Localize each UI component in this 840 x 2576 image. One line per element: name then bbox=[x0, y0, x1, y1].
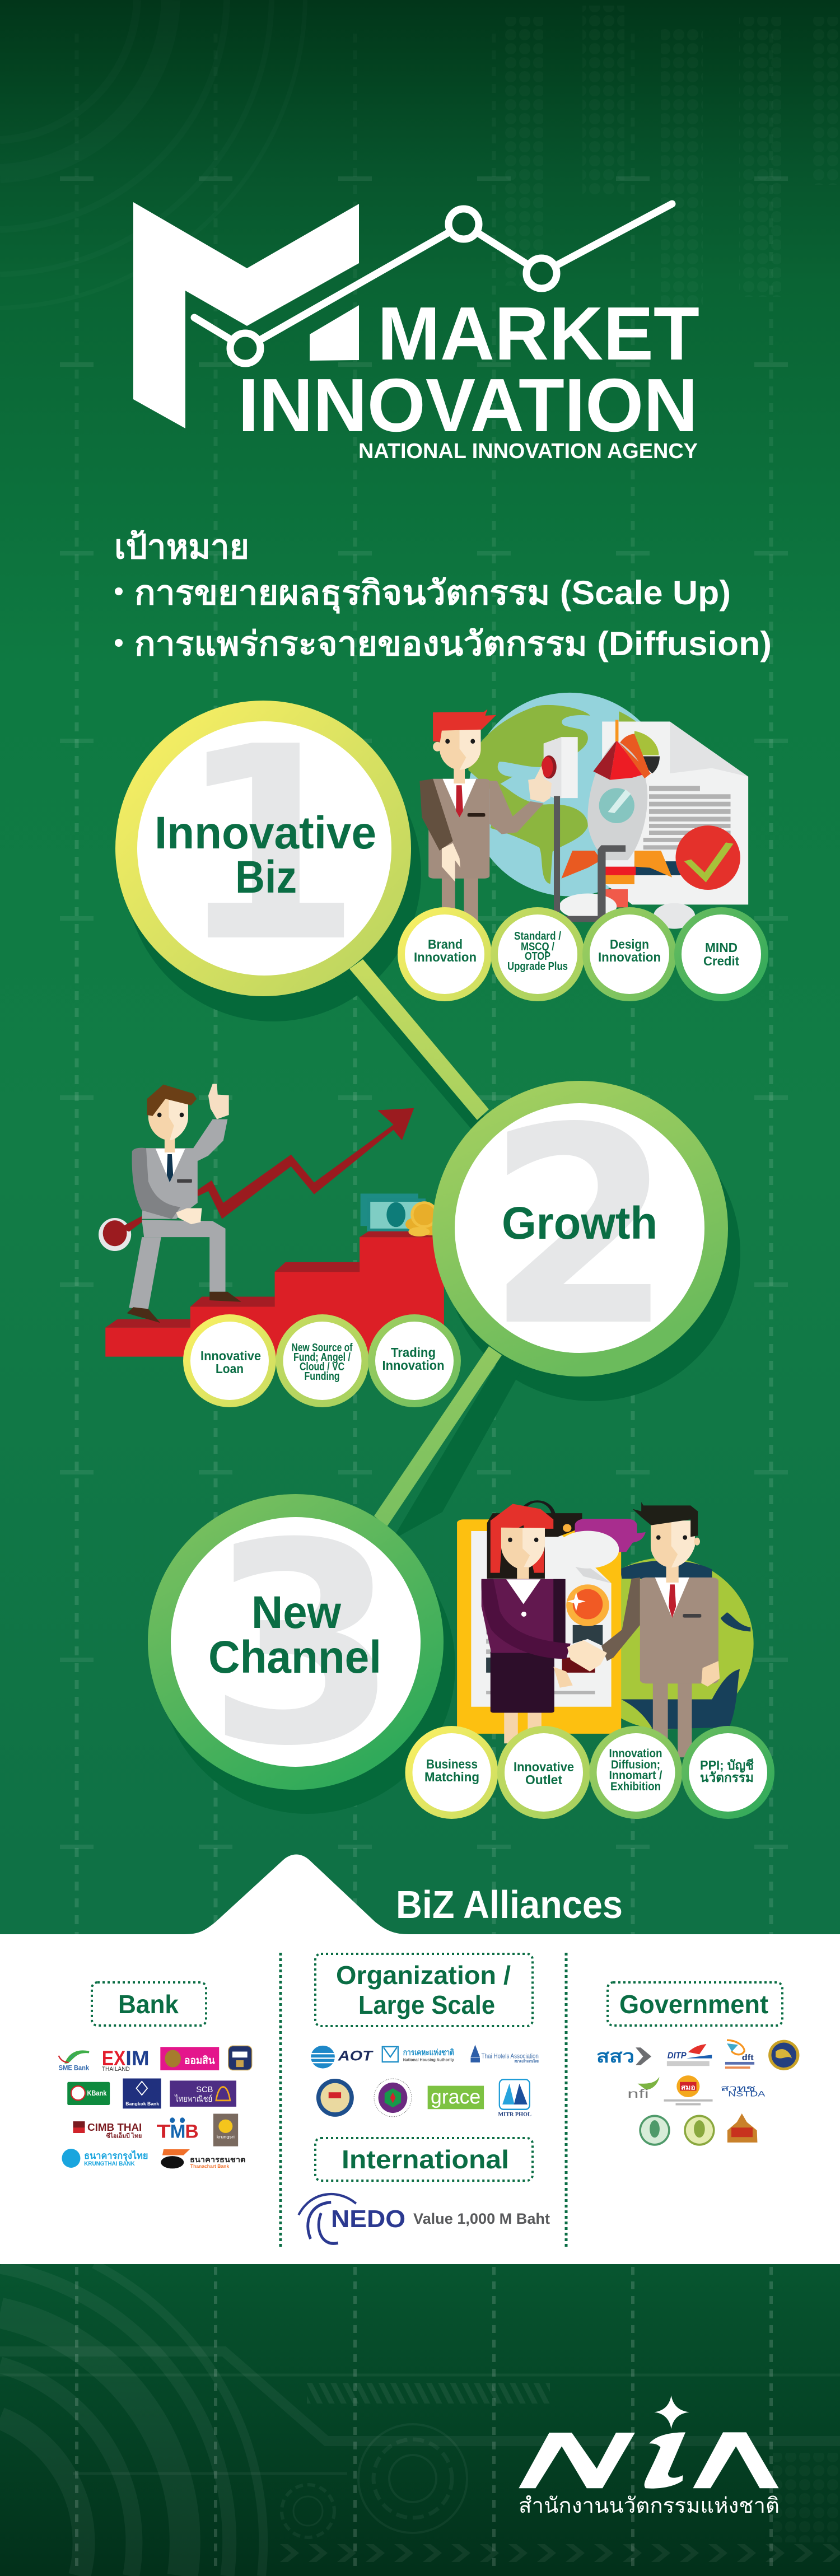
logo KBank bbox=[67, 2082, 110, 2105]
globe bbox=[576, 1558, 754, 1729]
logo EXIM Thailand: THAILAND bbox=[102, 2066, 130, 2073]
NIA Thai name: สำนักงานนวัตกรรมแห่งชาติ bbox=[519, 2494, 780, 2518]
big circle 3: New Channel bbox=[148, 1484, 444, 1807]
goal heading: เป้าหมาย bbox=[114, 528, 249, 566]
logo GSB: ออมสิน bbox=[184, 2055, 215, 2066]
logo TISI: สมอ bbox=[681, 2083, 696, 2092]
logo Bangkok Bank: Bangkok Bank bbox=[125, 2101, 160, 2107]
NEDO wordmark: NEDO bbox=[331, 2205, 405, 2233]
logo DFT: dft bbox=[742, 2053, 754, 2062]
logos: organizations and government bbox=[428, 2040, 799, 2146]
logo green seal one bbox=[639, 2115, 670, 2146]
label Innovative: Innovative bbox=[155, 808, 376, 858]
logo Board of Trade seal bbox=[316, 2079, 354, 2117]
section box: International bbox=[315, 2138, 533, 2181]
logo Krungsri bbox=[213, 2114, 238, 2146]
headset and speech bubbles bbox=[487, 1501, 646, 1579]
Innovative Loan bbox=[183, 1314, 276, 1407]
logo Thanachart Bank: ธนาคารธนชาต bbox=[190, 2155, 246, 2164]
Design Innovation bbox=[582, 907, 676, 1001]
section box: Organization / Large Scale: Large Scale bbox=[358, 1990, 495, 2019]
red stairs bbox=[105, 1231, 444, 1357]
Trading Innovation: Trading bbox=[391, 1345, 436, 1360]
logo EXIM Thailand: IM bbox=[125, 2046, 150, 2070]
logo Krungthai Bank bbox=[62, 2149, 148, 2168]
MIND Credit: MIND bbox=[705, 940, 738, 955]
section box: International: International bbox=[342, 2145, 509, 2174]
icon: M chart mark bbox=[133, 202, 672, 428]
logo AOT bbox=[310, 2046, 374, 2069]
logo SOSW: สสว bbox=[596, 2046, 634, 2066]
sub-circles: Growth services bbox=[183, 1314, 461, 1407]
logo National Housing Authority: การเคหะแห่งชาติ bbox=[403, 2047, 454, 2057]
logo CIMB Thai: ซีไอเอ็มบี ไทย bbox=[106, 2131, 142, 2140]
section box: Government: Government bbox=[619, 1990, 768, 2019]
PPI innovation list: PPI; บัญชี bbox=[700, 1758, 754, 1773]
character: businessman in grey suit bbox=[127, 1084, 241, 1323]
big circle 1: Innovative Biz bbox=[115, 690, 411, 1001]
illustration: handshake with clipboard and globe bbox=[457, 1501, 754, 1757]
label Channel: Channel bbox=[208, 1632, 381, 1683]
logo Thanachart Bank: Thanachart Bank bbox=[190, 2164, 230, 2169]
wordmark subtitle: NATIONAL INNOVATION AGENCY bbox=[358, 440, 698, 463]
logo DITP: DITP bbox=[668, 2051, 687, 2061]
logo DITP bbox=[667, 2044, 712, 2066]
logo NSTDA bbox=[721, 2083, 766, 2098]
logo TMB: M bbox=[170, 2120, 185, 2142]
logo: Market Innovation bbox=[133, 202, 699, 428]
PPI innovation list bbox=[682, 1726, 774, 1819]
logo GSB bbox=[160, 2047, 219, 2070]
big circle 2: Growth bbox=[432, 1070, 728, 1386]
logo NSTDA: สวทช bbox=[721, 2083, 755, 2093]
logo TMB: T bbox=[157, 2120, 171, 2142]
logo NEDO and value note bbox=[298, 2194, 550, 2243]
wordmark MARKET: MARKET bbox=[377, 291, 699, 376]
illustration: man, globe and rocket bbox=[419, 693, 748, 929]
logo AOT: AOT bbox=[338, 2048, 374, 2064]
Brand Innovation: Innovation bbox=[414, 950, 477, 964]
heading BiZ Alliances: BiZ Alliances bbox=[396, 1883, 623, 1926]
logo Thai Hotels Association: สมาคมโรงแรมไทย bbox=[515, 2059, 539, 2064]
number 2: 2 bbox=[485, 1070, 674, 1386]
Innovative Outlet: Outlet bbox=[525, 1772, 562, 1787]
logo Bangkok Bank bbox=[123, 2079, 161, 2108]
logo red gold crest bbox=[727, 2113, 757, 2143]
label Growth: Growth bbox=[502, 1198, 657, 1249]
sub-circles: Innovative Biz services bbox=[398, 907, 768, 1001]
logos: banks bbox=[59, 2046, 454, 2169]
growth arrow bbox=[99, 1108, 414, 1251]
Business Matching bbox=[405, 1726, 498, 1819]
Brand Innovation bbox=[398, 907, 492, 1001]
logo Mitr Phol: MITR PHOL bbox=[498, 2112, 531, 2118]
section box: Government bbox=[608, 1982, 782, 2026]
logo CIMB Thai bbox=[73, 2121, 142, 2140]
Innovative Loan: Innovative bbox=[200, 1348, 261, 1363]
signpost and button bbox=[542, 737, 626, 922]
Innovation Diffusion: Innovation bbox=[609, 1747, 662, 1760]
Innovation Diffusion: Exhibition bbox=[610, 1780, 661, 1793]
footer panel bbox=[0, 2264, 840, 2576]
money and coins bbox=[361, 1193, 443, 1236]
logo BAAC-like emblem bbox=[228, 2046, 252, 2070]
logo SCB bbox=[170, 2080, 236, 2107]
connector 2 to 3 bbox=[374, 1346, 502, 1527]
logo EXIM Thailand: EX bbox=[102, 2046, 126, 2070]
Trading Innovation: Innovation bbox=[382, 1358, 445, 1373]
Innovative Outlet bbox=[497, 1726, 590, 1819]
Standard MSCQ OTOP Upgrade Plus: MSCQ / bbox=[521, 941, 554, 953]
Standard MSCQ OTOP Upgrade Plus: OTOP bbox=[525, 950, 550, 963]
logo TMB: B bbox=[185, 2120, 199, 2142]
New Source of Fund: Cloud / VC bbox=[300, 1361, 344, 1373]
Innovative Outlet: Innovative bbox=[514, 1760, 574, 1774]
Trading Innovation bbox=[368, 1314, 461, 1407]
NEDO emblem bbox=[298, 2194, 356, 2243]
wordmark INNOVATION: INNOVATION bbox=[238, 363, 698, 447]
Brand Innovation: Brand bbox=[428, 937, 463, 951]
number 1: 1 bbox=[176, 690, 362, 1001]
character: businessman in brown suit bbox=[419, 709, 552, 922]
logo NSTDA: NSTDA bbox=[728, 2089, 766, 2098]
logo seal navy gold bbox=[768, 2040, 799, 2070]
logo TMB bbox=[157, 2117, 199, 2142]
goal 2: การแพร่กระจายของนวัตกรรม (Diffusion) bbox=[134, 625, 772, 662]
Standard MSCQ OTOP Upgrade Plus bbox=[491, 907, 585, 1001]
check mark badge bbox=[675, 825, 740, 890]
logo CIMB Thai: CIMB THAI bbox=[87, 2121, 142, 2133]
section box: Bank: Bank bbox=[118, 1990, 179, 2019]
logo NFI bbox=[627, 2077, 659, 2101]
Design Innovation: Design bbox=[610, 937, 649, 951]
logo SOSW bbox=[596, 2046, 651, 2066]
New Source of Fund bbox=[276, 1314, 368, 1407]
Business Matching: Matching bbox=[424, 1770, 479, 1784]
logo EXIM Thailand bbox=[102, 2046, 150, 2073]
logo NFI: nfi bbox=[627, 2087, 649, 2101]
connector 1 to 2 bbox=[349, 959, 489, 1120]
goals text block bbox=[114, 528, 772, 662]
logo green seal two bbox=[684, 2115, 715, 2146]
NIA mark bbox=[519, 2395, 779, 2489]
logo SCB: SCB bbox=[196, 2085, 213, 2094]
panel: BiZ Alliances white band bbox=[0, 1855, 840, 2264]
label Biz: Biz bbox=[235, 852, 297, 903]
rocket bbox=[561, 720, 672, 907]
New Source of Fund: Fund; Angel / bbox=[293, 1351, 351, 1364]
sub-circles: New Channel services bbox=[405, 1726, 774, 1819]
MIND Credit: Credit bbox=[703, 954, 739, 968]
logo National Housing Authority: National Housing Authority bbox=[403, 2058, 454, 2062]
PPI innovation list: นวัตกรรม bbox=[700, 1770, 754, 1785]
Standard MSCQ OTOP Upgrade Plus: Standard / bbox=[514, 930, 561, 942]
logo TISI bbox=[664, 2075, 713, 2105]
logo KBank: KBank bbox=[87, 2089, 107, 2097]
logo IEAT seal bbox=[374, 2079, 412, 2117]
logo Thai Hotels Association: Thai Hotels Association bbox=[482, 2053, 539, 2060]
globe bbox=[468, 693, 671, 896]
New Source of Fund: Funding bbox=[305, 1370, 339, 1383]
character: businessman with tie bbox=[567, 1502, 720, 1757]
Innovation Diffusion bbox=[589, 1726, 682, 1819]
logo Thai Hotels Association bbox=[470, 2045, 539, 2064]
clouds bbox=[559, 893, 695, 929]
Innovative Loan: Loan bbox=[216, 1361, 244, 1376]
logo SCB: ไทยพาณิชย์ bbox=[174, 2094, 212, 2103]
number 3: 3 bbox=[207, 1484, 399, 1807]
goal 1: การขยายผลธุรกิจนวัตกรรม (Scale Up) bbox=[134, 574, 731, 614]
logo NIA bbox=[519, 2395, 780, 2518]
medal bbox=[566, 1584, 609, 1646]
Design Innovation: Innovation bbox=[598, 950, 661, 964]
logo Krungsri: krungsri bbox=[217, 2134, 235, 2140]
section box: Organization / Large Scale bbox=[315, 1954, 533, 2026]
clipboard bbox=[457, 1519, 621, 1734]
logo SME Bank: SME Bank bbox=[59, 2064, 90, 2072]
character: businesswoman bbox=[481, 1504, 573, 1743]
section box: Bank bbox=[92, 1982, 206, 2026]
MIND Credit bbox=[674, 907, 768, 1001]
Innovation Diffusion: Innomart / bbox=[609, 1769, 662, 1782]
logo Krungthai Bank: KRUNGTHAI BANK bbox=[84, 2161, 135, 2167]
logo DFT bbox=[725, 2040, 754, 2069]
value note: Value 1,000 M Baht bbox=[413, 2210, 550, 2227]
illustration: man climbing stairs with growth arrow bbox=[99, 1084, 444, 1357]
Innovation Diffusion: Diffusion; bbox=[611, 1758, 660, 1771]
section box: Organization / Large Scale: Organization / bbox=[336, 1961, 511, 1990]
logo Krungthai Bank: ธนาคารกรุงไทย bbox=[84, 2150, 148, 2162]
label New: New bbox=[251, 1587, 341, 1638]
logo grace: grace bbox=[431, 2086, 480, 2108]
document bbox=[602, 722, 748, 904]
logo Mitr Phol bbox=[498, 2079, 531, 2118]
logo SME Bank bbox=[59, 2051, 90, 2072]
logo Thanachart Bank bbox=[161, 2149, 246, 2169]
Standard MSCQ OTOP Upgrade Plus: Upgrade Plus bbox=[507, 960, 568, 973]
logo National Housing Authority bbox=[382, 2047, 454, 2062]
New Source of Fund: New Source of bbox=[291, 1342, 353, 1354]
Business Matching: Business bbox=[426, 1757, 478, 1771]
